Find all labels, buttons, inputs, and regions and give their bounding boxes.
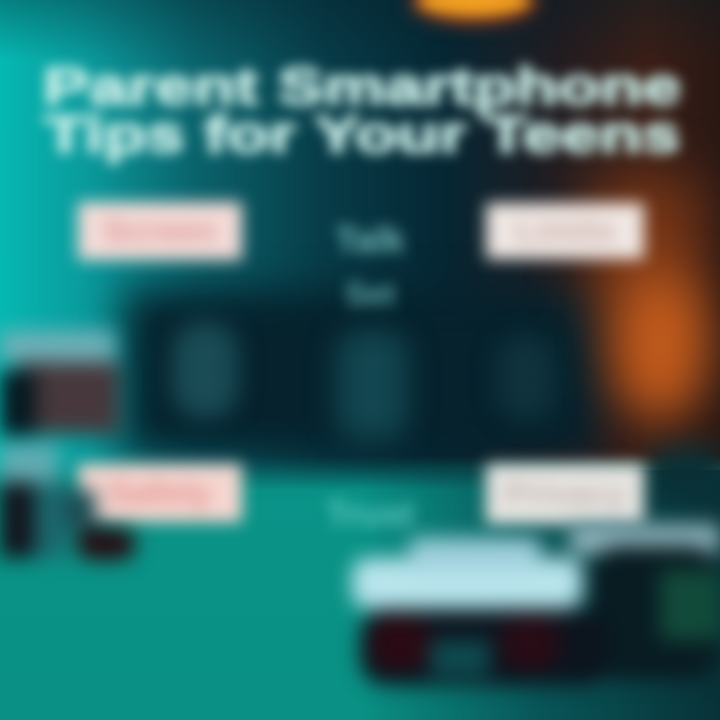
- card: top right: Limits: [515, 212, 615, 250]
- card: bottom left: Safety: [109, 474, 211, 512]
- phone silhouette right: [496, 335, 556, 420]
- center labels: [324, 218, 418, 534]
- dark patch right of lower card: [650, 445, 720, 500]
- phone silhouettes: [172, 322, 238, 418]
- title: [35, 56, 689, 173]
- dark band above floor: [125, 290, 595, 455]
- card: bottom right: Privacy: [504, 475, 626, 513]
- card: bottom left: [78, 464, 242, 522]
- lower floor shading: [0, 470, 720, 720]
- title: Parent Smartphone: [43, 58, 681, 116]
- top sun glow: [418, 0, 530, 16]
- card: bottom right: [486, 464, 644, 524]
- right device cluster: [336, 510, 720, 700]
- center labels: Set: [345, 276, 395, 312]
- card: top left: Screen: [103, 212, 217, 250]
- phone silhouette center: [336, 330, 408, 440]
- orange glow: [610, 270, 710, 420]
- center labels: Trust: [326, 493, 414, 534]
- card: top right: [486, 203, 644, 259]
- card: top left: [78, 202, 242, 260]
- title: Tips for Your Teens: [44, 106, 680, 164]
- orange glow upper wash: [590, 180, 700, 310]
- center labels: Talk: [335, 219, 405, 260]
- left device cluster: [0, 316, 148, 575]
